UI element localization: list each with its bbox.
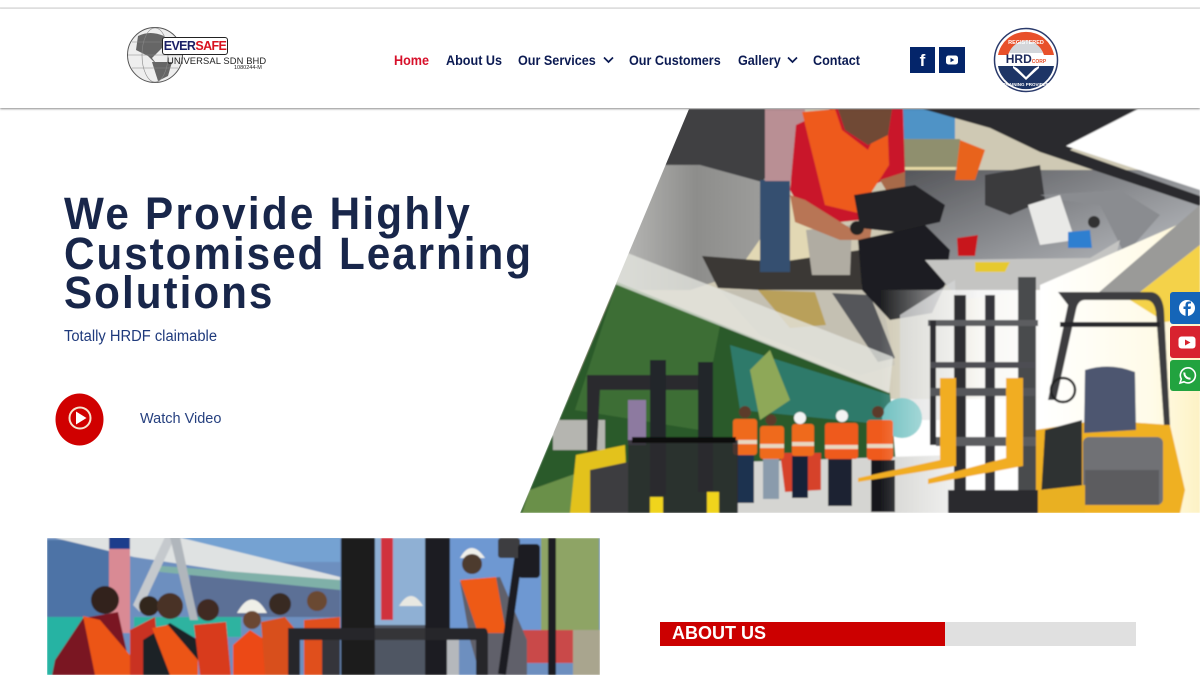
nav: Gallery: Gallery: [738, 52, 781, 68]
about us heading bar: [660, 622, 1136, 646]
top browser strip: [0, 7, 1200, 9]
icon: services chevron: [604, 56, 614, 64]
icon: red play button: [56, 394, 104, 446]
photo: small yellow forklift: [570, 360, 738, 513]
logo: Eversafe Universal: EVERSAFE: [164, 39, 226, 53]
figure: forklift mast and cab: [288, 538, 556, 675]
photo: translucent diagonal band: [610, 252, 893, 393]
photo: white fade behind big forklift: [884, 288, 1041, 513]
badge: HRD Corp registered training provider: REGISTERED: [1008, 40, 1044, 46]
icon: facebook header button: [910, 47, 935, 73]
logo: Eversafe Universal: [127, 27, 266, 83]
nav: Home: Home: [394, 52, 429, 68]
figure: group of trainees: [52, 586, 340, 675]
floating social: youtube: [1170, 326, 1200, 358]
floating social: facebook: [1170, 292, 1200, 324]
logo: Eversafe Universal: 1080244-M: [234, 65, 262, 71]
about us red label: ABOUT US: [672, 623, 766, 643]
header bar: [0, 9, 1200, 108]
badge: HRD Corp registered training provider: TRAINING PROVIDER: [1003, 82, 1050, 87]
logo: Eversafe Universal: UNIVERSAL SDN BHD: [167, 55, 266, 66]
photo: trees and trainees group: [520, 282, 954, 513]
photo: engine inspection background: [568, 109, 1138, 400]
text: hero subtitle: Totally HRDF claimable: [64, 328, 217, 345]
photo: yellow and grey corner panel: [1040, 205, 1200, 513]
photo: trainees standing: [733, 406, 895, 512]
nav: Our Customers: Our Customers: [629, 52, 721, 68]
icon: facebook header button: f: [920, 51, 925, 70]
photo: big yellow forklift: [858, 277, 1185, 513]
icon: youtube header button: [939, 47, 965, 73]
nav: Contact: Contact: [813, 52, 860, 68]
badge: HRD Corp registered training provider: HRDCORP: [1006, 52, 1047, 66]
heading: hero title: [64, 188, 533, 318]
badge: HRD Corp registered training provider: [994, 28, 1058, 92]
icon: gallery chevron: [788, 56, 798, 64]
floating social: whatsapp: [1170, 360, 1200, 391]
photo: trainees watching forklift demonstration: [47, 538, 600, 675]
heading: hero title: We Provide Highly: [64, 188, 472, 239]
photo: forklift hood and engine bay: [854, 109, 1200, 420]
photo: white area above hood: [1066, 109, 1200, 190]
nav: About Us: About Us: [446, 52, 502, 68]
photo: trainee in orange vest: [790, 109, 918, 240]
about us red label: [660, 622, 945, 646]
nav: Our Services: Our Services: [518, 52, 596, 68]
text: watch video label: Watch Video: [140, 411, 221, 427]
heading: hero title: Solutions: [64, 267, 274, 318]
heading: hero title: Customised Learning: [64, 228, 533, 278]
scene: factory building background: [47, 537, 600, 675]
hero photo collage: [520, 109, 1200, 513]
